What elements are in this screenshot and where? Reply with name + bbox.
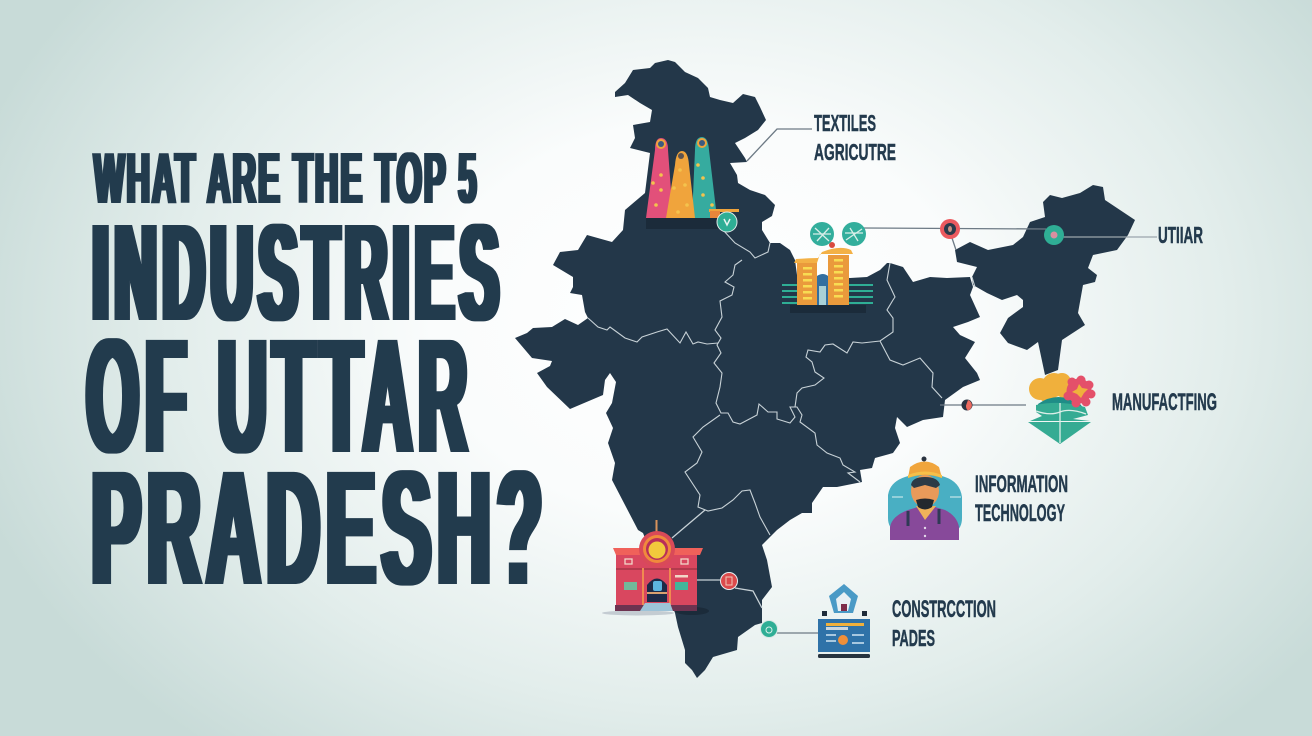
label: trades: PADES <box>892 625 935 651</box>
marker: teal badge <box>760 620 778 638</box>
label: uttar: UTIIAR <box>1158 222 1203 248</box>
label: manufacturing: MANUFACTFING <box>1112 389 1217 416</box>
icon: flower and arrow <box>1028 373 1096 444</box>
marker: teal dot <box>1044 225 1064 245</box>
label: textiles: TEXTILES <box>814 110 876 136</box>
text: INDUSTRIES <box>92 196 504 350</box>
marker: red dot <box>940 219 960 239</box>
map of India <box>515 60 1135 678</box>
text: PRADESH? <box>92 436 548 619</box>
label: agriculture: AGRICUTRE <box>814 139 896 165</box>
text: OF UTTAR <box>86 304 474 487</box>
marker: red badge <box>720 572 738 590</box>
icon: shield and screen <box>818 584 870 658</box>
icon: textile chimneys <box>646 137 739 232</box>
label: technology: TECHNOLOGY <box>975 500 1065 527</box>
connector lines <box>672 129 1157 633</box>
marker: small dot <box>962 400 972 410</box>
label: information: INFORMATION <box>975 471 1068 498</box>
icon: station building <box>602 520 709 616</box>
title: WHAT ARE THE TOP 5 <box>94 138 478 219</box>
icon: factory buildings <box>782 222 873 313</box>
label: construction: CONSTRCCTION <box>892 596 996 623</box>
icon: worker <box>888 456 962 540</box>
title <box>86 138 548 619</box>
